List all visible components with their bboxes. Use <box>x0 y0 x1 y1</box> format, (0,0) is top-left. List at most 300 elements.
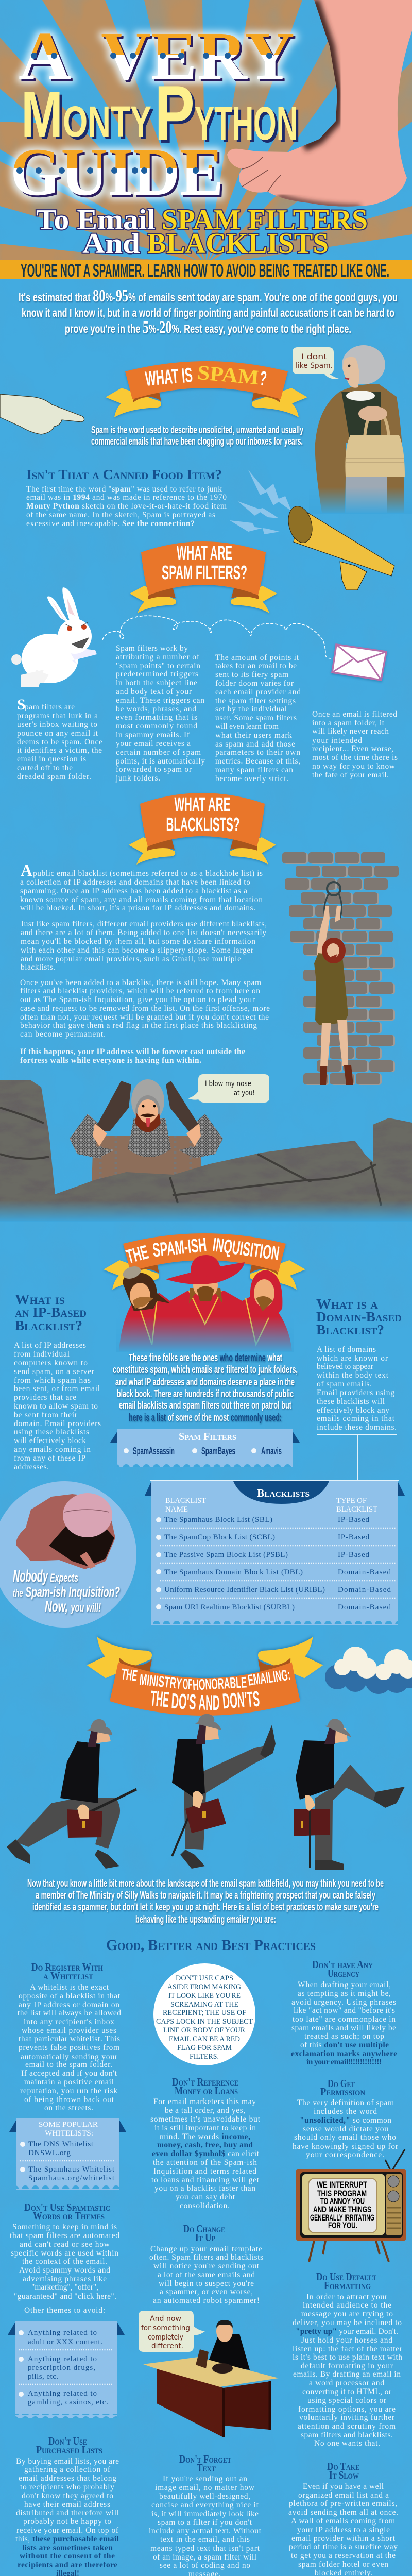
block: purchased lists: email addresses that belong <box>19 2474 116 2483</box>
block: urgency: avoid urgency. Using phrases <box>291 1998 396 2007</box>
section: the spam-ish inquisition <box>0 1233 405 1628</box>
text column 3: each email provider and <box>215 688 301 697</box>
text block: domain-based blacklist: these blacklists will <box>317 1397 385 1406</box>
text block: IP-based blacklist: providers that are <box>14 1393 76 1402</box>
text block: canned food: of the same name. In the sketch, Spam is portrayed as <box>26 511 215 519</box>
table column headers: BLACKLIST <box>165 1497 206 1505</box>
block: caps white circle: DON'T USE CAPS <box>176 1974 233 1982</box>
block: take it slow: It Slow <box>329 2469 359 2481</box>
table rows: Spam URI Realtime Blocklist (SURBL) <box>164 1603 295 1612</box>
text block: IP-based blacklist: any emails coming in <box>14 1445 91 1454</box>
block: caps white circle: IT LOOK LIKE YOU'RE <box>168 1992 241 2000</box>
block: default formatting: Formatting <box>324 2279 371 2292</box>
text column 1: user's inbox waiting to <box>17 720 97 729</box>
text: nobody expects: Nobody <box>13 1567 48 1585</box>
block: get permission: should only email those who <box>294 2133 396 2142</box>
text block: domain-based blacklist: within the body text <box>317 1371 389 1380</box>
text: nobody expects <box>13 1567 120 1615</box>
text: blacklist explanation: If this happens, your IP address will be forever cast outside the <box>20 1047 245 1056</box>
block: take it slow: email provider within a short <box>291 2534 396 2543</box>
text column 1: it identifies a victim, the <box>17 746 102 755</box>
text: blacklist explanation: spamming. Once an IP address has been added to a blacklist as a <box>20 887 247 895</box>
block: purchased lists: without the consent of the <box>20 2552 115 2561</box>
block: urgency: Don't have Any <box>312 1958 373 1971</box>
speech bubble: I dont like Spam: I dont <box>301 353 328 361</box>
panel: nobody expects circle <box>0 1481 136 1628</box>
speech bubble: I dont like Spam <box>293 347 339 379</box>
tv screen message: THIS PROGRAM <box>317 2189 367 2198</box>
text block: domain-based blacklist: Email providers using <box>317 1388 394 1397</box>
text block: domain-based blacklist: Blacklist? <box>316 1322 384 1337</box>
text block: domain-based blacklist: of spam emails. <box>317 1380 372 1388</box>
text: blacklist explanation: can become permanent. <box>20 1030 106 1039</box>
block: take it slow: A wall of emails coming from <box>291 2517 395 2526</box>
block: spamtastic words: "guaranteed" and "click here". <box>14 2292 116 2301</box>
block: default formatting <box>293 2270 403 2448</box>
table rows <box>156 1516 397 1612</box>
section: the ministry of honorable emailing <box>7 1637 412 2576</box>
text: blacklist explanation: Once you've been added to a blacklist, there is still hope. Many spam <box>20 978 261 987</box>
ribbon heading: ministry: DO'S <box>171 1689 197 1714</box>
text: silly walks intro: behaving like the upstanding emailer you are: <box>135 1914 276 1925</box>
subtitle: SPAM FILTERS <box>162 204 368 236</box>
ribbon heading text: INQUISITION <box>211 1234 281 1265</box>
block: purchased lists: recipients and are therefore <box>18 2561 117 2569</box>
heading: good better best practices: Good, Better and Best Practices <box>106 1937 316 1954</box>
text column 1 <box>17 696 102 781</box>
block: take it slow: Do Take <box>327 2460 359 2472</box>
title: MONTY PYTHON: M <box>21 79 63 150</box>
title: MONTY PYTHON: ONTY <box>65 100 154 148</box>
panel: popular whitelists: Spamhaus.org/whitelist <box>28 2174 115 2182</box>
illustration: silly walker one <box>7 1719 136 1869</box>
table column headers <box>165 1497 377 1514</box>
block: default formatting: default formatting in your <box>301 2362 393 2370</box>
subtitle <box>36 204 368 260</box>
speech bubble: and now for something completely different <box>139 2311 205 2352</box>
text: who determines spam: black book. There are hundreds if not thousands of public <box>117 1388 294 1400</box>
text column 3: what their users mark <box>215 731 292 740</box>
text: blacklist explanation: behavior that gave them a red flag in the first place this blacklisting <box>20 1021 257 1030</box>
panel: themes to avoid: adult or XXX content. <box>28 2338 102 2346</box>
ribbon heading: what is spam: SPAM <box>196 361 260 389</box>
block: spamtastic words <box>10 2201 119 2315</box>
block: get permission: have knowingly signed up for <box>293 2142 399 2151</box>
block: forget text: spam to a filter if you don't <box>158 2518 252 2527</box>
illustration: clouds <box>325 1647 412 1694</box>
block: take it slow: to get you a reservation at the <box>291 2551 396 2560</box>
block: register with a whitelist: the list will always be allowed <box>18 2009 121 2018</box>
table rows: The Spamhaus Domain Block List (DBL) <box>164 1568 303 1577</box>
panel: spam filters list: Amavis <box>261 1446 282 1457</box>
block: purchased lists: gathering a collection of <box>24 2465 111 2474</box>
text: who determines spam: These fine folks are the ones who determine what <box>129 1352 282 1364</box>
block: register with a whitelist: Do Register With <box>31 1961 103 1973</box>
text column 4: Once an email is filtered <box>312 710 397 719</box>
subtitle: BLACKLISTS <box>147 228 329 260</box>
block: register with a whitelist: into any recipient's inbox <box>24 2018 114 2026</box>
title: MONTY PYTHON: M <box>24 81 65 153</box>
section: what are spam filters <box>11 541 398 783</box>
block: forget text: Text <box>197 2462 216 2474</box>
block: money or loans: mind. The words income, <box>160 2132 250 2141</box>
text: who determines spam: and what IP addresses and domains deserve a place in the <box>115 1377 295 1388</box>
text block: IP-based blacklist: from individual <box>14 1350 70 1359</box>
table column headers: BLACKLIST <box>336 1505 377 1514</box>
block: spamtastic words: Other themes to avoid: <box>24 2306 105 2315</box>
text column 1: email in question is <box>17 755 86 764</box>
text: blacklist explanation <box>20 861 270 1065</box>
text block: IP-based blacklist: domain. Email providers <box>14 1419 101 1428</box>
text: nobody expects: the Spam-ish Inquisition? <box>13 1584 120 1600</box>
text column 2: your email receives a <box>116 739 191 748</box>
text column 2: Spam filters work by <box>116 644 188 653</box>
table column headers: NAME <box>165 1505 188 1514</box>
text column 2: predetermined triggers <box>116 670 198 679</box>
table rows: IP-Based <box>338 1516 370 1524</box>
block: change it up: Do Change <box>183 2223 225 2235</box>
text column 3 <box>215 653 301 783</box>
block: take it slow: your IP address to a single <box>297 2526 390 2534</box>
text column 2: junk folders. <box>115 774 160 783</box>
icon: megaphone <box>285 504 394 590</box>
speech bubble: I blow my nose at you: at you! <box>234 1089 255 1097</box>
text: blacklist explanation: filters and blacklist providers, which will be referred to from here on <box>20 987 260 995</box>
panel: popular whitelists: The Spamhaus Whitelist <box>28 2165 115 2174</box>
ribbon heading: ministry: THE <box>149 1686 170 1712</box>
block: caps white circle: RECEPIENT; THE USE OF <box>163 2009 246 2017</box>
speech bubble: and now for something completely different: completely <box>148 2333 183 2342</box>
text column 2: certain number of spam <box>116 748 201 757</box>
text column 1: pounce on any email it <box>17 729 98 738</box>
block: money or loans: For email marketers this may <box>153 2097 256 2106</box>
text column 3: takes for an email to be <box>215 662 297 670</box>
tv screen message: TO ANNOY YOU <box>320 2196 365 2206</box>
panel: themes to avoid: Anything related to <box>28 2329 97 2337</box>
block: get permission: Do Get <box>328 2077 355 2090</box>
block: spamtastic words: and can't read or see how <box>20 2240 110 2249</box>
ribbon heading text: SPAM-ISH <box>151 1234 208 1261</box>
table rows: IP-Based <box>338 1533 370 1541</box>
speech bubble: and now for something completely different: And now <box>150 2315 181 2323</box>
block: change it up: an automated robot spammer! <box>153 2296 260 2305</box>
block: money or loans: it is still important to keep in <box>154 2124 256 2132</box>
subtitle: And <box>82 228 140 260</box>
text: spam definition <box>91 425 304 447</box>
title: MONTY PYTHON: P <box>154 70 195 157</box>
panel: themes to avoid: gambling, casinos, etc. <box>28 2398 108 2406</box>
text column 2: in spammy emails. If <box>116 731 190 739</box>
text column 1: deems to be spam. Once <box>17 738 102 747</box>
block: change it up: a lot of the same emails and <box>158 2270 255 2279</box>
block: urgency: like "act now" and "before it's <box>294 2006 395 2015</box>
block: purchased lists: don't know they agreed to <box>22 2492 113 2500</box>
text: blacklist explanation: Just like spam filters, different email providers use different blacklists, <box>21 920 267 928</box>
ribbon heading: what is spam: ? <box>258 367 268 391</box>
text column 2: attributing a number of <box>116 653 200 662</box>
icon: envelope <box>332 645 386 680</box>
panel: spam filters list: Spam Filters <box>179 1430 236 1443</box>
block: take it slow: spam folder hotel or even <box>298 2560 388 2569</box>
panel: themes to avoid: Anything related to <box>28 2389 97 2398</box>
text column 2: and body text of your <box>116 687 192 696</box>
block: money or loans: the attention of the Spam-ish <box>153 2158 257 2167</box>
illustration: pointing fist <box>16 1493 115 1569</box>
panel: popular whitelists: SOME POPULAR <box>39 2121 98 2129</box>
block: spamtastic words: the context of the email. <box>22 2257 107 2266</box>
block: default formatting: spam filters and blacklists. <box>301 2431 393 2439</box>
text block: canned food: Monty Python sketch on the love-it-or-hate-it food item <box>26 502 227 511</box>
block: default formatting: voluntarily inviting further <box>299 2413 395 2422</box>
block: register with a whitelist: email to the spam folder. <box>25 2060 112 2069</box>
block: purchased lists: distributed and therefore will <box>16 2509 119 2517</box>
block: spamtastic words: advertising phrases like <box>23 2275 107 2283</box>
block: register with a whitelist: A whitelist is the exact <box>30 1983 109 1992</box>
text: blacklist explanation: and more popular email providers, such as Gmail, use multiple <box>21 955 241 963</box>
block: urgency: of this don't use multiple <box>300 2041 389 2049</box>
text column 1: pam filters are <box>25 703 75 711</box>
block: caps white circle: FILTERS. <box>190 2053 219 2061</box>
text: blacklist explanation: often than not, your request will be granted but if you don't correct the <box>20 1013 269 1022</box>
block: forget text: If you're sending out an <box>163 2475 247 2483</box>
text column 4: will likely never reach <box>312 727 389 736</box>
text column 1: dreaded spam folder. <box>17 772 91 781</box>
block: purchased lists: lists are sometimes taken <box>22 2544 113 2552</box>
text column 4: no way for you to know <box>312 762 396 771</box>
title: MONTY PYTHON: YTHON <box>195 97 298 150</box>
text block: IP-based blacklist: computers known to <box>14 1359 88 1367</box>
intro text <box>19 286 398 337</box>
block: spamtastic words: that spam filters are automated <box>10 2231 119 2240</box>
text column 3: parameters to their own <box>215 748 300 757</box>
ribbon heading: blacklists <box>129 793 276 865</box>
ribbon heading: ministry: HONORABLE <box>192 1674 247 1694</box>
tv screen message: AND MAKE THINGS <box>313 2205 371 2214</box>
icon: lightning bolts <box>230 470 291 534</box>
text column 1: programs that lurk in a <box>17 711 98 720</box>
title: MONTY PYTHON: P <box>157 72 197 160</box>
block: urgency <box>291 1958 397 2066</box>
ribbon heading: spam filters: WHAT ARE <box>177 543 232 564</box>
block: caps white circle <box>153 1963 255 2065</box>
text column 3: metrics. Because of this, <box>215 757 300 766</box>
block: caps white circle: SCREAMING AT THE <box>170 2001 238 2009</box>
text block: IP-based blacklist <box>14 1292 101 1471</box>
block: default formatting: attention and scrutiny from <box>298 2422 396 2431</box>
panel: spam filters list <box>110 1429 300 1467</box>
text block: IP-based blacklist: from any of these IP <box>14 1454 85 1463</box>
text column 3: become overly strict. <box>215 774 288 783</box>
block: register with a whitelist: that particular whitelist. This <box>19 2035 120 2043</box>
block: take it slow: period of time is a surefire way <box>289 2543 398 2551</box>
block: urgency: When drafting your email, <box>298 1980 391 1989</box>
block: spamtastic words: Don't Use Spamtastic <box>24 2201 110 2213</box>
panel: themes to avoid <box>8 2321 125 2418</box>
speech bubble: I dont like Spam: like Spam. <box>296 362 333 370</box>
block: purchased lists: probably not be happy to <box>23 2517 111 2526</box>
text block: IP-based blacklist: will effectively block <box>14 1436 86 1445</box>
illustration: silly walker three <box>294 1719 405 1870</box>
block: register with a whitelist: If accepted and if you don't <box>21 2069 117 2078</box>
block: forget text <box>149 2453 262 2576</box>
speech bubble: I blow my nose at you <box>188 1074 269 1103</box>
block: register with a whitelist: opposite of a blacklist in that <box>19 1992 121 2001</box>
block: urgency: treated as such; on top <box>304 2032 384 2041</box>
text block: domain-based blacklist: What is a <box>316 1296 378 1312</box>
block: default formatting: Do Use Default <box>316 2270 376 2283</box>
block: forget text: beautifully well-designed, <box>159 2492 250 2501</box>
text: nobody expects: Now, you will! <box>45 1598 101 1615</box>
text block: IP-based blacklist: addresses. <box>14 1463 49 1471</box>
text block: domain-based blacklist: which are known or <box>317 1354 388 1363</box>
text block: IP-based blacklist: send spam, on a server <box>14 1367 95 1376</box>
text column 3: The amount of points it <box>215 653 299 662</box>
title <box>10 18 368 260</box>
block: purchased lists: By buying email lists, you are <box>16 2457 119 2466</box>
illustration: old woman with handbag <box>309 345 412 514</box>
text: who determines spam <box>113 1352 298 1423</box>
text column 1: carted off to the <box>17 764 73 772</box>
block: get permission: "unsolicited," so common <box>300 2116 391 2125</box>
sunburst rays <box>0 0 412 265</box>
text block: IP-based blacklist: using these blacklists <box>14 1428 89 1436</box>
block: caps white circle: LINE OR BODY OF YOUR <box>163 2026 245 2035</box>
text block: canned food: The first time the word "spam" was used to refer to junk <box>26 485 222 494</box>
text column 3: many spam filters can <box>215 766 293 774</box>
text: blacklist explanation: out as The Spam-ish Inquisition, give you the option to plead your <box>20 995 255 1004</box>
tv screen message <box>310 2180 374 2230</box>
text column 2: in both the subject line <box>116 679 197 687</box>
block: money or loans: you can say debt <box>176 2193 235 2201</box>
icon: pointing hand <box>0 394 84 434</box>
block: caps white circle: CAPS LOCK IN THE SUBJECT <box>156 2018 253 2026</box>
block: get permission: The very definition of spam <box>297 2098 394 2107</box>
block: money or loans: Don't Reference <box>172 2076 238 2088</box>
block: purchased lists: have their email address <box>24 2500 110 2509</box>
text: blacklist explanation: with each other and this can become a slippery slope. Some larger <box>21 946 254 955</box>
text block: IP-based blacklist: known to allow spam to <box>14 1402 98 1411</box>
block: default formatting: "pretty up" your email. Don't. <box>296 2327 398 2336</box>
block: urgency: too late" are commonplace in <box>293 2015 396 2024</box>
block: get permission <box>293 2077 399 2159</box>
text block: IP-based blacklist: from which spam has <box>14 1376 91 1385</box>
title: GUIDE: GUIDE <box>10 134 224 210</box>
illustration: brick wall <box>282 852 399 1085</box>
block: change it up: will notice you're sending out <box>153 2262 260 2270</box>
text column 2: "spam points" to certain <box>116 662 200 670</box>
text: who determines spam: email blacklists and spam filters out there on patrol but <box>119 1400 291 1411</box>
text column 2: even formatting that is <box>116 713 197 722</box>
text block: canned food <box>26 467 227 528</box>
ribbon heading: ministry: OF <box>183 1676 192 1693</box>
title: GUIDE: GUIDE <box>12 136 226 212</box>
text: blacklist explanation: known source of spam, any and all emails coming from that location <box>20 895 263 904</box>
text: blacklist explanation: will be blocked. In short, it's a prison for IP addresses and domains. <box>20 904 255 912</box>
block: default formatting: is it's best to use plain text with <box>293 2353 402 2362</box>
illustration: taunting French knight <box>70 1079 223 1185</box>
block: spamtastic words: "marketing", "offer", <box>31 2283 98 2292</box>
block: forget text: include any actual text. Without <box>149 2527 262 2535</box>
text column 2: forwarded to spam or <box>116 765 192 774</box>
title: MONTY PYTHON: YTHON <box>197 100 300 152</box>
block: get permission: your correspondence. <box>306 2150 384 2159</box>
block: urgency: in your email!!!!!!!!!!!!!! <box>306 2058 382 2066</box>
text column 1: S <box>17 696 26 713</box>
text column 3: set by the individual <box>215 705 287 714</box>
block: money or loans: even dollar $ymbol$ can elicit <box>152 2149 260 2158</box>
block: spamtastic words: Something to keep in mind is <box>12 2223 117 2231</box>
block: change it up: a spammer, or even worse, <box>160 2287 253 2296</box>
block: get permission: sense would dictate you <box>303 2125 388 2133</box>
text block: canned food: email was in 1994 and was made in reference to the 1970 <box>26 493 227 502</box>
block: register with a whitelist: on the streets. <box>44 2104 93 2112</box>
text column 4: most of the time there is <box>312 753 398 762</box>
title: A VERY: VERY <box>101 18 295 94</box>
table rows: The Spamhaus Block List (SBL) <box>164 1516 272 1524</box>
text block: domain-based blacklist: A list of domains <box>317 1345 376 1354</box>
section: what is spam <box>0 345 412 590</box>
block: default formatting: Just hold your horses and <box>301 2336 392 2345</box>
block: register with a whitelist <box>18 1961 121 2112</box>
title: MONTY PYTHON: ONTY <box>63 97 151 146</box>
ribbon heading: ministry: DON'TS <box>221 1687 261 1713</box>
block: caps white circle: FLAG FOR SPAM <box>177 2044 232 2052</box>
panel: popular whitelists: The DNS Whitelist <box>28 2140 94 2148</box>
text block: canned food: Isn't That a Canned Food Item? <box>26 467 222 482</box>
ribbon heading text <box>124 1234 281 1268</box>
block: urgency: spam emails and will likely be <box>291 2024 396 2032</box>
text: blacklist explanation: blacklists. <box>21 963 55 972</box>
block: money or loans: consolidation. <box>180 2201 230 2210</box>
illustration: inquisitors <box>104 1233 305 1352</box>
block: caps white circle: EMAIL CAN BE A RED <box>169 2035 240 2043</box>
illustration: killer rabbit <box>11 587 97 687</box>
text block: IP-based blacklist: What is <box>15 1292 65 1307</box>
ribbon heading: what is spam <box>106 361 307 417</box>
block: money or loans: to loans and financing will get <box>151 2176 260 2184</box>
ribbon heading: ministry: EMAILING: <box>247 1666 291 1689</box>
block: register with a whitelist: automatically sending your <box>21 2053 118 2061</box>
block: money or loans: money, cash, free, buy and <box>157 2141 253 2149</box>
block: take it slow <box>288 2460 398 2576</box>
block: change it up: Change up your email template <box>150 2245 262 2253</box>
block: default formatting: deliver, you may be inclined to <box>293 2318 402 2327</box>
block: money or loans: be a tall order, and yes, <box>165 2106 245 2115</box>
text column 4: into a spam folder, it <box>312 719 385 727</box>
text: blacklist explanation: public email blacklist (sometimes referred to as a blackhole list) is <box>33 869 263 878</box>
tv screen message: GENERALLY IRRITATING <box>310 2213 374 2223</box>
block: forget text: see a lot of coding and no <box>160 2561 250 2570</box>
text: blacklist explanation: mean you'll be blocked by them all, but some do share information <box>21 937 255 946</box>
block: change it up <box>149 2223 263 2305</box>
ribbon heading: spam filters: SPAM FILTERS? <box>162 562 247 584</box>
text block: IP-based blacklist: A list of IP addresses <box>14 1341 86 1350</box>
panel: blacklists table: Blacklists <box>257 1487 310 1499</box>
panel: themes to avoid: pills, etc. <box>28 2372 58 2381</box>
text block: domain-based blacklist: Domain-Based <box>316 1309 402 1325</box>
text: who determines spam: here is a list of some of the most commonly used: <box>129 1412 282 1423</box>
block: purchased lists: Purchased Lists <box>36 2444 102 2456</box>
block: get permission: Permission <box>320 2086 365 2098</box>
text block: canned food: excessive and inescapable. See the connection? <box>26 519 195 528</box>
block: spamtastic words: Words or Themes <box>33 2210 105 2222</box>
speech bubble: and now for something completely different: different. <box>151 2342 183 2350</box>
block: money or loans <box>150 2076 261 2210</box>
block: purchased lists: to recipients who probably <box>20 2483 114 2492</box>
block: forget text: concise and everything nice it <box>151 2501 259 2510</box>
block: change it up: It Up <box>195 2231 215 2244</box>
text: blacklist explanation: a collection of IP addresses and domains that have been linked to <box>20 878 250 887</box>
